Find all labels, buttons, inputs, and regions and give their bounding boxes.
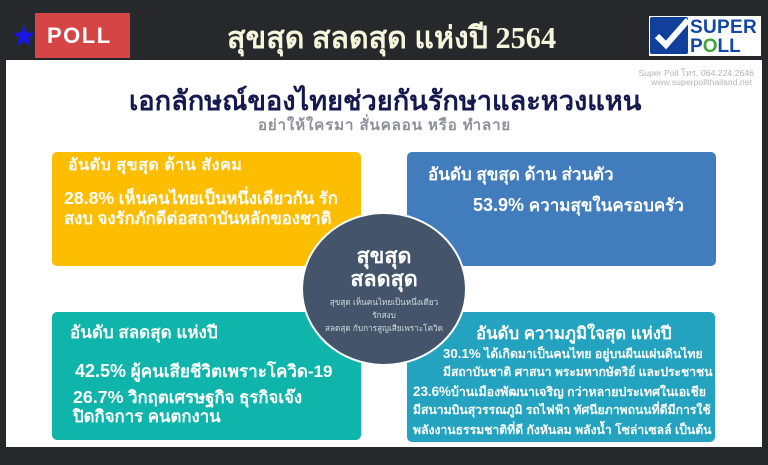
panel text: 28.8% เห็นคนไทยเป็นหนึ่งเดียวกัน รัก (64, 188, 338, 208)
logo wordmark (690, 17, 757, 57)
circle caption: สุขสุด เห็นคนไทยเป็นหนึ่งเดียว (330, 298, 438, 307)
contact text (638, 68, 754, 87)
logo wordmark: SUPER (690, 17, 757, 38)
circle caption: สลดสุด กับการสูญเสียเพราะโควิด (325, 324, 443, 333)
centre circle (301, 212, 467, 366)
panel heading: อันดับ ความภูมิใจสุด แห่งปี (476, 324, 672, 343)
circle title (350, 244, 418, 292)
top title: สุขสุด สลดสุด แห่งปี 2564 (227, 21, 556, 55)
panel heading: อันดับ สลดสุด แห่งปี (70, 323, 218, 342)
panel text: airport: มีสนามบินสุวรรณภูมิ รถไฟฟ้า ทัศนียภาพถนนที่ดีมีการใช้ (413, 403, 711, 417)
circle title: สลดสุด (350, 267, 418, 291)
panel text: 30.1: 30.1% ได้เกิดมาเป็นคนไทย อยู่บนผืนแผ่นดินไทย (443, 346, 703, 361)
panel: top right personal (407, 152, 716, 266)
contact text: www.superpollthailand.net (651, 77, 752, 87)
icon: check mark (650, 17, 688, 54)
panel text: ปิดกิจการ คนตกงาน (73, 407, 221, 426)
circle caption (325, 296, 443, 334)
panel text (64, 186, 338, 228)
panel heading: อันดับ สุขสุด ด้าน ส่วนตัว (428, 165, 614, 184)
panel text: 53.9% ความสุขในครอบครัว (473, 195, 684, 215)
panel text: สงบ จงรักภักดีต่อสถาบันหลักของชาติ (64, 209, 331, 228)
poll badge: POLL (47, 23, 112, 48)
panel: bottom right pride (407, 312, 715, 442)
panel text: 26.7% วิกฤตเศรษฐกิจ ธุรกิจเจ๊ง (73, 387, 302, 407)
panel text: 42.5% ผู้คนเสียชีวิตเพราะโควิด-19 (75, 361, 332, 381)
panel text: institutions: มีสถาบันชาติ ศาสนา พระมหากษัตริย์ และประชาชน (443, 365, 713, 379)
subheading: อย่าให้ใครมา สั่นคลอน หรือ ทำลาย (258, 117, 511, 134)
logo: super poll (649, 16, 761, 56)
panel: top left social (52, 152, 361, 266)
logo wordmark: POLL (690, 36, 741, 57)
circle title: สุขสุด (357, 244, 411, 268)
panel text (72, 387, 302, 426)
panel text: energy: พลังงานธรรมชาติที่ดี กังหันลม พลังน้ำ โซล่าเซลล์ เป็นต้น (413, 423, 711, 437)
panel: bottom left worst (52, 312, 361, 440)
main heading: เอกลักษณ์ของไทยช่วยกันรักษาและหวงแหน (129, 85, 641, 116)
icon: blue star (13, 25, 35, 46)
panel text: 23.6: 23.6%บ้านเมืองพัฒนาเจริญ กว่าหลายประเทศในเอเชีย (413, 384, 706, 399)
circle caption: รักสงบ (372, 311, 396, 320)
poll badge (35, 13, 130, 58)
contact text: Super Poll โทร. 064.224.2646 (638, 68, 754, 78)
panel heading: อันดับ สุขสุด ด้าน สังคม (68, 157, 242, 174)
